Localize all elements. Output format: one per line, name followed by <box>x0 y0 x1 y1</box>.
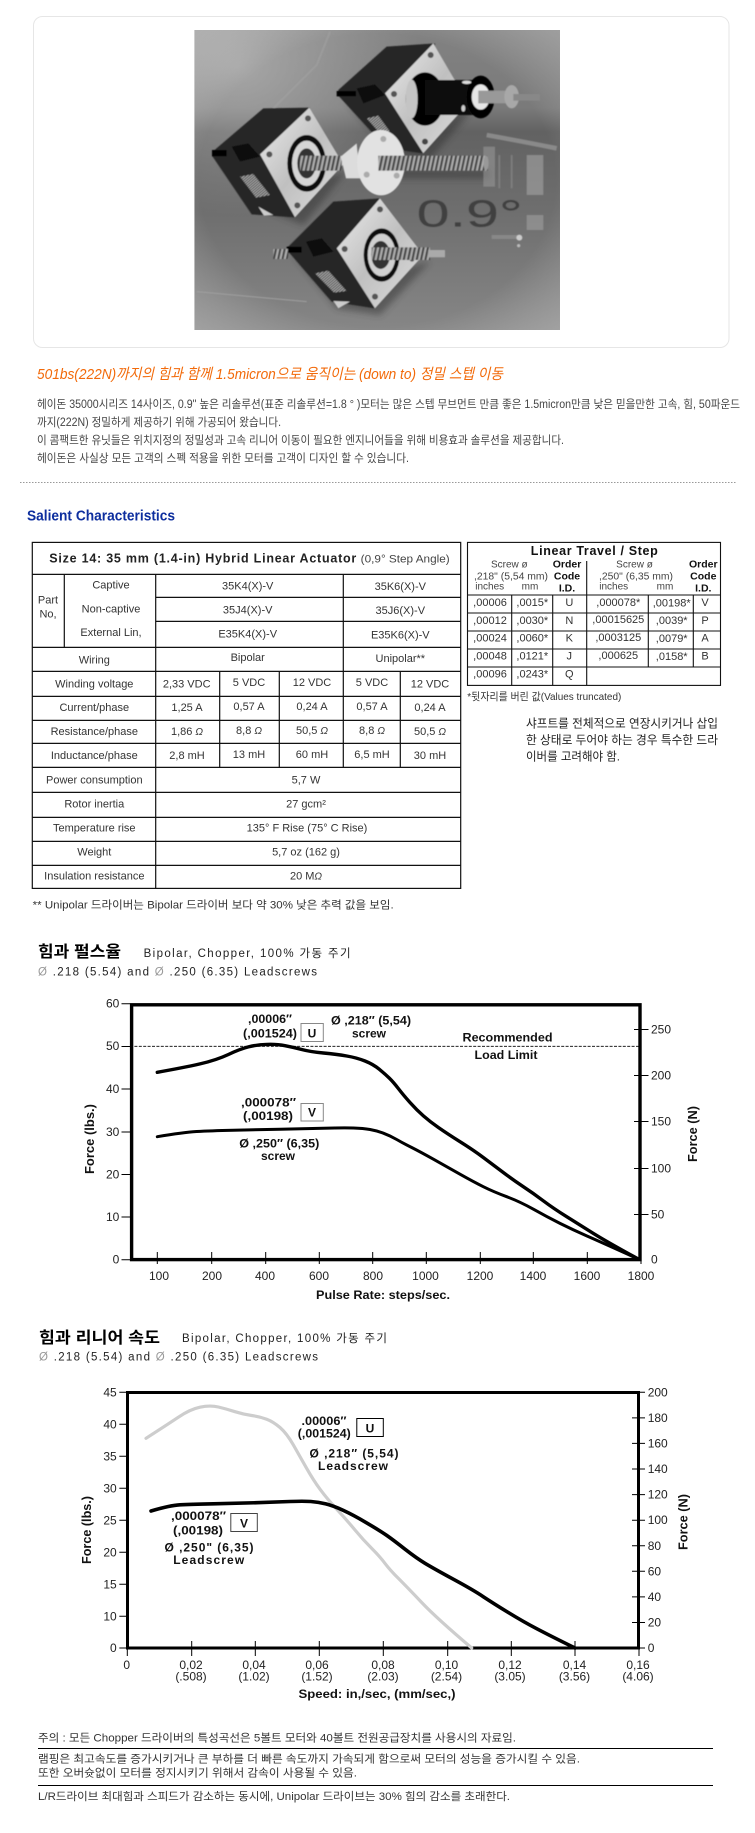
electrical rows: Current/phase <box>59 702 129 714</box>
photo: three linear actuators <box>194 30 560 330</box>
table title: Size 14: 35 mm (1.4-in) Hybrid Linear Actuator <box>49 551 356 565</box>
left axis labels <box>103 1385 117 1655</box>
axis title: force lbs: Force (lbs.) <box>80 1496 94 1564</box>
right axis labels: 0 <box>651 1252 658 1266</box>
travel table values: ,000078* <box>596 597 641 609</box>
callout U: .00006″ <box>302 1414 347 1428</box>
right axis labels: 160 <box>648 1436 668 1450</box>
electrical rows <box>51 652 449 762</box>
callout U: U <box>366 1421 374 1435</box>
x axis labels: (4.06) <box>622 1670 654 1684</box>
curve U gray <box>146 1406 472 1648</box>
travel table values: ,000625 <box>598 650 638 662</box>
callout V: (,00198) <box>243 1109 293 1123</box>
part number rows: 35J6(X)-V <box>376 605 426 617</box>
callout U: (,001524) <box>298 1427 351 1441</box>
chart: force vs linear speed <box>80 1385 690 1701</box>
note: values truncated: *뒷자리를 버린 값(Values truncated) <box>467 690 621 703</box>
travel table values: ,0079* <box>656 633 688 645</box>
travel table headers: Code <box>690 570 717 582</box>
electrical rows: Unipolar** <box>376 653 426 665</box>
electrical rows: Bipolar <box>231 652 265 664</box>
electrical rows: 6,5 mH <box>354 749 390 761</box>
electrical rows: Resistance/phase <box>51 726 138 738</box>
electrical rows: 50,5 Ω <box>296 725 328 737</box>
x axis labels: 600 <box>309 1269 329 1283</box>
electrical rows: 5 VDC <box>356 677 388 689</box>
heading: orange tagline: 501bs(222N)까지의 힘과 함께 1.5micron으로 움직이는 (down to) 정밀 스텝 이동 <box>37 366 504 383</box>
left axis labels: 20 <box>103 1545 117 1559</box>
right axis labels: 0 <box>648 1641 655 1655</box>
callout V: Leadscrew <box>173 1553 245 1567</box>
part number rows: 35K4(X)-V <box>222 580 274 592</box>
general rows: 27 gcm² <box>286 798 326 810</box>
footer notes: 램핑은 최고속도를 증가시키거나 큰 부하를 더 빠른 속도까지 가속되게 함으로써 모터의 성능을 증가시킬 수 있음. <box>38 1752 580 1766</box>
callout U: Ø ,218″ (5,54) <box>310 1446 398 1460</box>
right axis labels: 50 <box>651 1208 665 1222</box>
axis title: speed: Speed: in,/sec, (mm/sec,) <box>298 1687 456 1701</box>
electrical rows: 30 mH <box>414 750 446 762</box>
right axis labels: 60 <box>648 1564 661 1578</box>
callout U: Ø ,218″ (5,54) <box>331 1013 411 1027</box>
text block: product description <box>37 398 740 465</box>
axis title: force N: Force (N) <box>676 1494 690 1550</box>
electrical rows: 1,25 A <box>171 702 203 714</box>
x axis labels: 0,14 <box>563 1658 587 1672</box>
heading: force vs pulse rate: Ø .218 (5.54) and Ø .250 (6.35) Leadscrews <box>38 967 317 979</box>
text block: special driver note: 한 상태로 두어야 하는 경우 특수한 드라 <box>526 733 718 747</box>
travel table values: ,00198* <box>653 598 691 610</box>
callout V: ,000078″ <box>171 1509 226 1523</box>
x axis labels: 0,12 <box>498 1658 522 1672</box>
general rows: 20 MΩ <box>290 870 322 882</box>
table title: (0,9° Step Angle) <box>361 553 450 565</box>
x axis labels <box>149 1269 655 1283</box>
callout V <box>239 1096 323 1163</box>
left axis labels: 40 <box>106 1082 120 1096</box>
table: linear travel per step <box>467 542 721 685</box>
x axis labels: (3.56) <box>559 1670 590 1684</box>
heading: force vs pulse rate: Bipolar, Chopper, 100% 가동 주기 <box>144 947 351 960</box>
x axis labels: 1200 <box>467 1269 494 1283</box>
right axis labels: 100 <box>651 1162 671 1176</box>
travel table headers: Order <box>689 558 718 570</box>
left axis labels: 40 <box>103 1417 117 1431</box>
left axis labels <box>106 996 120 1266</box>
travel table values: K <box>566 633 574 645</box>
footer notes: L/R드라이브 최대힘과 스피드가 감소하는 동시에, Unipolar 드라이브는 30% 힘의 감소를 초래한다. <box>38 1789 510 1803</box>
electrical rows: 1,86 Ω <box>171 726 203 738</box>
axis title: pulse rate: Pulse Rate: steps/sec. <box>316 1288 450 1302</box>
right axis labels: 150 <box>651 1114 671 1128</box>
x axis labels: 800 <box>363 1269 383 1283</box>
general rows: Power consumption <box>46 774 143 786</box>
right axis labels: 250 <box>651 1022 671 1036</box>
text block: special driver note <box>526 717 718 764</box>
callout: recommended load limit: Recommended <box>462 1031 552 1045</box>
electrical rows: 0,57 A <box>356 701 388 713</box>
electrical rows: 60 mH <box>296 749 328 761</box>
x axis labels: (1.52) <box>301 1670 333 1684</box>
left axis labels: 20 <box>106 1168 120 1182</box>
electrical rows: 12 VDC <box>293 677 331 689</box>
x axis labels: (.508) <box>175 1670 207 1684</box>
right axis labels: 20 <box>648 1616 661 1630</box>
right axis labels <box>648 1385 668 1655</box>
left axis labels: 35 <box>103 1449 117 1463</box>
travel table values: ,00012 <box>473 615 507 627</box>
x axis labels: 200 <box>202 1269 222 1283</box>
heading: force vs linear speed: Bipolar, Chopper, 100% 가동 주기 <box>182 1332 387 1345</box>
travel table headers: Screw ø <box>491 559 528 570</box>
travel table values: V <box>701 597 709 609</box>
x axis labels: 400 <box>255 1269 275 1283</box>
right axis labels: 180 <box>648 1411 668 1425</box>
travel table values: J <box>567 650 572 662</box>
travel table values: ,00096 <box>473 668 507 680</box>
travel table headers: inches <box>475 581 504 592</box>
travel table values: A <box>701 633 709 645</box>
travel table headers: ,250" (6,35 mm) <box>599 571 673 582</box>
left axis labels: 45 <box>103 1385 117 1399</box>
electrical rows: 50,5 Ω <box>414 726 446 738</box>
heading: force vs pulse rate <box>38 943 351 979</box>
travel table values: P <box>701 615 709 627</box>
left axis labels: 30 <box>103 1481 117 1495</box>
travel table headers: I.D. <box>695 583 712 595</box>
x axis labels: 0,10 <box>435 1658 459 1672</box>
travel table values <box>473 597 709 680</box>
text block: product description: 까지(222N) 정밀하게 제공하기 위해 가공되어 왔습니다. <box>37 415 281 429</box>
x axis labels: (2.03) <box>367 1670 399 1684</box>
x axis labels: 100 <box>149 1269 169 1283</box>
electrical rows: 0,24 A <box>414 702 446 714</box>
travel table values: ,0121* <box>516 650 549 662</box>
callout V: ,000078″ <box>241 1096 296 1110</box>
callout: recommended load limit: Load Limit <box>474 1048 538 1062</box>
x axis labels: 1000 <box>412 1269 439 1283</box>
left axis labels: 50 <box>106 1039 120 1053</box>
electrical rows: Inductance/phase <box>51 750 138 762</box>
right axis labels: 200 <box>651 1068 671 1082</box>
left axis labels: 30 <box>106 1125 120 1139</box>
axis title: force lbs: Force (lbs.) <box>83 1104 97 1174</box>
electrical rows: 8,8 Ω <box>359 725 385 737</box>
footnote: unipolar: ** Unipolar 드라이버는 Bipolar 드라이버 보다 약 30% 낮은 추력 값을 보임. <box>33 897 394 911</box>
travel table values: ,0039* <box>656 615 688 627</box>
left axis labels: 0 <box>113 1252 120 1266</box>
travel table values: ,00024 <box>473 633 507 645</box>
left axis labels: 0 <box>110 1641 117 1655</box>
callout V: (,00198) <box>173 1523 223 1537</box>
travel table values: ,00048 <box>473 650 507 662</box>
part number rows: E35K4(X)-V <box>218 628 278 640</box>
travel table values: N <box>565 615 573 627</box>
travel table headers: I.D. <box>559 583 575 595</box>
callout V: Ø ,250" (6,35) <box>164 1541 254 1555</box>
callout U: (,001524) <box>243 1026 297 1040</box>
travel table headers <box>474 558 718 595</box>
travel table headers: inches <box>599 581 628 592</box>
right axis labels <box>651 1022 671 1266</box>
electrical rows: 2,33 VDC <box>163 678 211 690</box>
travel table headers: mm <box>522 581 538 592</box>
x axis labels: 0,06 <box>305 1658 329 1672</box>
x axis labels: 1600 <box>574 1269 601 1283</box>
x axis labels: 0,08 <box>371 1658 395 1672</box>
travel table values: ,0243* <box>516 668 549 680</box>
left axis labels: 15 <box>103 1577 117 1591</box>
x axis labels: 1800 <box>628 1269 655 1283</box>
text block: product description: 헤이돈은 사실상 모든 고객의 스펙 적용을 위한 모터를 고객이 디자인 할 수 있습니다. <box>37 452 409 465</box>
white nut <box>341 143 360 178</box>
travel table values: B <box>701 650 709 662</box>
general rows <box>44 774 367 882</box>
electrical rows: 13 mH <box>233 749 265 761</box>
right axis labels: 40 <box>648 1590 661 1604</box>
x axis labels: (1.02) <box>238 1670 270 1684</box>
travel table values: ,0003125 <box>595 632 641 644</box>
table: specification <box>32 542 461 888</box>
electrical rows: Wiring <box>79 654 110 666</box>
x axis labels <box>123 1658 654 1684</box>
axis title: force N: Force (N) <box>686 1106 700 1162</box>
curve V <box>157 1128 638 1259</box>
callout U <box>243 1012 411 1042</box>
x axis labels: 1400 <box>520 1269 547 1283</box>
travel table values: ,0158* <box>656 651 688 663</box>
right axis labels: 200 <box>648 1385 668 1399</box>
callout V: V <box>240 1517 248 1531</box>
general rows: 5,7 oz (162 g) <box>272 846 340 858</box>
x axis labels: 0,02 <box>179 1658 203 1672</box>
callout U: Leadscrew <box>318 1459 389 1473</box>
right axis labels: 140 <box>648 1462 668 1476</box>
travel table headers: mm <box>657 581 673 592</box>
travel table values: ,0015* <box>516 597 549 609</box>
left axis labels: 25 <box>103 1513 117 1527</box>
panel: product photo card <box>34 16 729 348</box>
electrical rows: Winding voltage <box>55 678 133 690</box>
left axis labels: 60 <box>106 996 120 1010</box>
heading: Salient Characteristics: Salient Characteristics <box>27 508 175 524</box>
part number rows: 35K6(X)-V <box>375 581 427 593</box>
x axis labels: 0 <box>123 1658 130 1672</box>
right axis labels: 100 <box>648 1513 668 1527</box>
motor top right <box>338 43 435 153</box>
chart: force vs pulse rate <box>83 996 700 1302</box>
general rows: 5,7 W <box>292 774 321 786</box>
curve V black <box>151 1501 575 1648</box>
x axis labels: 0,04 <box>242 1658 266 1672</box>
curve U <box>157 1044 638 1259</box>
heading: force vs pulse rate: 힘과 펄스율 <box>38 943 121 961</box>
callout U: screw <box>352 1026 387 1040</box>
electrical rows: 0,57 A <box>233 701 265 713</box>
electrical rows: 8,8 Ω <box>236 725 262 737</box>
travel table values: ,00015625 <box>592 614 644 626</box>
heading: force vs linear speed: 힘과 리니어 속도 <box>39 1329 160 1347</box>
x axis labels: 0,16 <box>626 1658 650 1672</box>
part number rows: Captive <box>92 579 130 591</box>
callout V: screw <box>261 1149 296 1163</box>
footer notes: 주의 : 모든 Chopper 드라이버의 특성곡선은 5볼트 모터와 40볼트 전원공급장치를 사용시의 자료임. <box>38 1732 516 1745</box>
callout U <box>298 1414 398 1473</box>
general rows: Insulation resistance <box>44 870 144 882</box>
callout U: ,00006″ <box>248 1012 292 1026</box>
heading: force vs linear speed <box>39 1329 387 1364</box>
degree mark text: 0.9° <box>417 193 523 235</box>
part number rows: External Lin, <box>80 627 142 639</box>
general rows: Weight <box>77 846 111 858</box>
general rows: Rotor inertia <box>64 798 125 810</box>
travel table headers: ,218" (5,54 mm) <box>474 571 548 582</box>
electrical rows: 2,8 mH <box>169 750 205 762</box>
travel table values: U <box>565 597 573 609</box>
heading: force vs linear speed: Ø .218 (5.54) and Ø .250 (6.35) Leadscrews <box>39 1352 318 1364</box>
travel table values: ,0060* <box>516 633 549 645</box>
part number rows: Part <box>38 594 58 606</box>
travel table headers: Code <box>554 570 580 582</box>
right axis labels: 80 <box>648 1539 661 1553</box>
text block: special driver note: 샤프트를 전체적으로 연장시키거나 삽입 <box>526 717 718 731</box>
part number rows <box>38 579 430 641</box>
x axis labels: (2.54) <box>431 1670 462 1684</box>
text block: special driver note: 이버를 고려해야 함. <box>526 750 620 764</box>
electrical rows: 5 VDC <box>233 677 265 689</box>
travel table values: Q <box>565 668 574 680</box>
motor left <box>213 108 310 217</box>
callout V: V <box>308 1106 316 1120</box>
callout V <box>164 1509 257 1567</box>
travel table title: Linear Travel / Step <box>531 544 658 558</box>
x axis labels: (3.05) <box>494 1670 526 1684</box>
right axis labels: 120 <box>648 1488 668 1502</box>
electrical rows: 12 VDC <box>411 678 449 690</box>
callout: recommended load limit <box>462 1031 552 1062</box>
part number rows: 35J4(X)-V <box>223 604 273 616</box>
travel table values: ,0030* <box>516 615 549 627</box>
callout V: Ø ,250″ (6,35) <box>239 1136 319 1150</box>
travel table headers: Screw ø <box>616 559 653 570</box>
left axis labels: 10 <box>103 1609 117 1623</box>
text block: product description: 이 콤팩트한 유닛들은 위치지정의 정밀성과 고속 리니어 이동이 필요한 엔지니어들을 위해 비용효과 솔루션을 제공합니다. <box>37 434 564 447</box>
footer notes <box>38 1732 713 1803</box>
part number rows: E35K6(X)-V <box>371 629 430 641</box>
travel table values: ,00006 <box>473 597 507 609</box>
general rows: 135° F Rise (75° C Rise) <box>247 822 367 834</box>
travel table headers: Order <box>553 558 581 570</box>
electrical rows: 0,24 A <box>296 701 328 713</box>
general rows: Temperature rise <box>53 822 136 834</box>
footer notes: 또한 오버슛없이 모터를 정지시키기 위해서 감속이 사용될 수 있음. <box>38 1766 357 1780</box>
callout U: U <box>308 1026 316 1040</box>
left axis labels: 10 <box>106 1210 120 1224</box>
part number rows: Non-captive <box>82 603 140 615</box>
part number rows: No, <box>39 608 57 620</box>
motor bottom <box>288 198 380 308</box>
